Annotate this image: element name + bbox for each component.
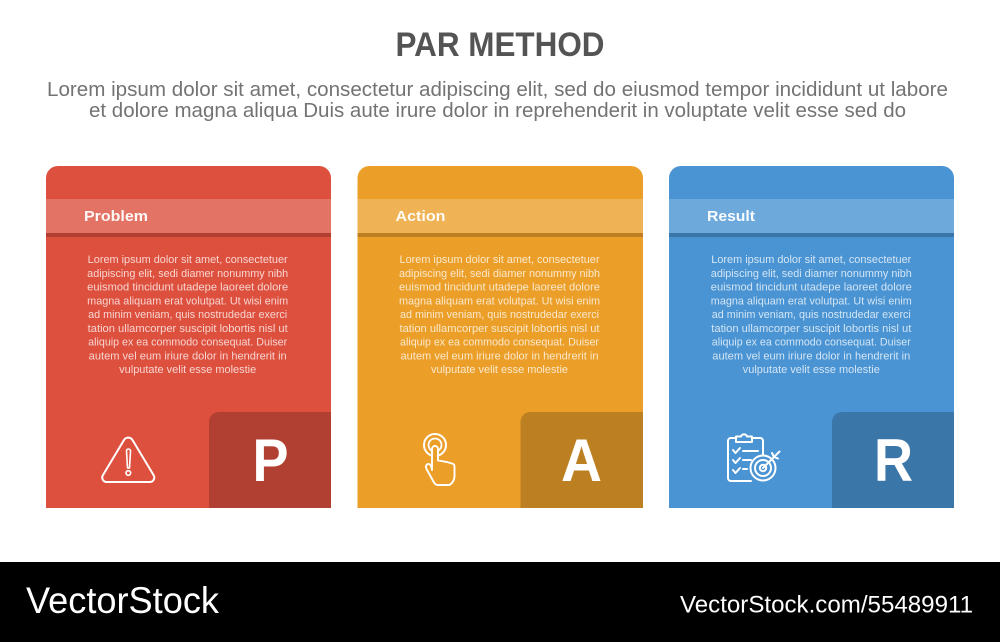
body text: euismod tincidunt utadepe laoreet dolore bbox=[87, 282, 288, 294]
letter badge: A bbox=[520, 412, 643, 508]
body text: vulputate velit esse molestie bbox=[119, 364, 256, 376]
body text: aliquip ex ea commodo consequat. Duiser bbox=[400, 336, 599, 348]
body text: tation ullamcorper suscipit lobortis nisl ut bbox=[88, 323, 288, 335]
body text: Lorem ipsum dolor sit amet, consectetuer bbox=[400, 254, 600, 266]
body text: adipiscing elit, sedi diamer nonummy nibh bbox=[399, 268, 600, 280]
heading: action: Action bbox=[396, 208, 446, 225]
letter badge: R: R bbox=[874, 427, 913, 494]
header underline bbox=[358, 233, 643, 237]
body text bbox=[399, 254, 600, 376]
heading: problem: Problem bbox=[84, 208, 148, 225]
body text: autem vel eum iriure dolor in hendrerit in bbox=[89, 350, 287, 362]
body text bbox=[87, 254, 288, 376]
subtitle: Lorem ipsum dolor sit amet, consectetur adipiscing elit, sed do eiusmod tempor incididunt ut labore bbox=[47, 79, 948, 101]
body text: Lorem ipsum dolor sit amet, consectetuer bbox=[88, 254, 288, 266]
body text: ad minim veniam, quis nostrudedar exerci bbox=[712, 309, 911, 321]
body text: euismod tincidunt utadepe laoreet dolore bbox=[711, 282, 912, 294]
body text: ad minim veniam, quis nostrudedar exerci bbox=[88, 309, 287, 321]
panel background bbox=[46, 166, 331, 508]
header underline bbox=[669, 233, 954, 237]
body text: aliquip ex ea commodo consequat. Duiser bbox=[712, 336, 911, 348]
title: PAR METHOD bbox=[396, 26, 604, 64]
footer bar bbox=[0, 562, 1000, 642]
body text: autem vel eum iriure dolor in hendrerit in bbox=[400, 350, 599, 362]
panel: result bbox=[669, 166, 954, 508]
body text: tation ullamcorper suscipit lobortis nisl ut bbox=[400, 323, 600, 335]
body text: vulputate velit esse molestie bbox=[431, 364, 568, 376]
panel background bbox=[358, 166, 643, 508]
icon: clipboard with target bbox=[728, 434, 780, 481]
body text: Lorem ipsum dolor sit amet, consectetuer bbox=[711, 254, 912, 266]
header band bbox=[46, 199, 331, 233]
body text: magna aliquam erat volutpat. Ut wisi enim bbox=[87, 295, 288, 307]
header band bbox=[669, 199, 954, 233]
body text: ad minim veniam, quis nostrudedar exerci bbox=[400, 309, 599, 321]
panel: action bbox=[358, 166, 643, 508]
letter badge: P bbox=[209, 412, 331, 508]
header band bbox=[358, 199, 643, 233]
footer url text: VectorStock.com/55489911 bbox=[680, 592, 973, 618]
panel background bbox=[669, 166, 954, 508]
body text: magna aliquam erat volutpat. Ut wisi enim bbox=[399, 295, 600, 307]
icon: warning triangle bbox=[102, 438, 154, 482]
header underline bbox=[46, 233, 331, 237]
subtitle bbox=[47, 79, 948, 122]
body text: vulputate velit esse molestie bbox=[743, 364, 880, 376]
body text: adipiscing elit, sedi diamer nonummy nibh bbox=[87, 268, 288, 280]
heading: result: Result bbox=[707, 208, 755, 225]
footer logo text: VectorStock bbox=[26, 580, 219, 621]
panel: problem bbox=[46, 166, 331, 508]
body text bbox=[711, 254, 912, 376]
letter badge: P: P bbox=[252, 427, 288, 494]
body text: adipiscing elit, sedi diamer nonummy nibh bbox=[711, 268, 912, 280]
subtitle: et dolore magna aliqua Duis aute irure dolor in reprehenderit in voluptate velit esse sed do bbox=[89, 100, 906, 122]
body text: aliquip ex ea commodo consequat. Duiser bbox=[88, 336, 288, 348]
body text: autem vel eum iriure dolor in hendrerit in bbox=[712, 350, 910, 362]
body text: euismod tincidunt utadepe laoreet dolore bbox=[399, 282, 600, 294]
letter badge: A: A bbox=[561, 427, 602, 494]
icon: tap hand bbox=[424, 434, 455, 485]
letter badge: R bbox=[832, 412, 954, 508]
body text: magna aliquam erat volutpat. Ut wisi enim bbox=[711, 295, 912, 307]
body text: tation ullamcorper suscipit lobortis nisl ut bbox=[711, 323, 911, 335]
